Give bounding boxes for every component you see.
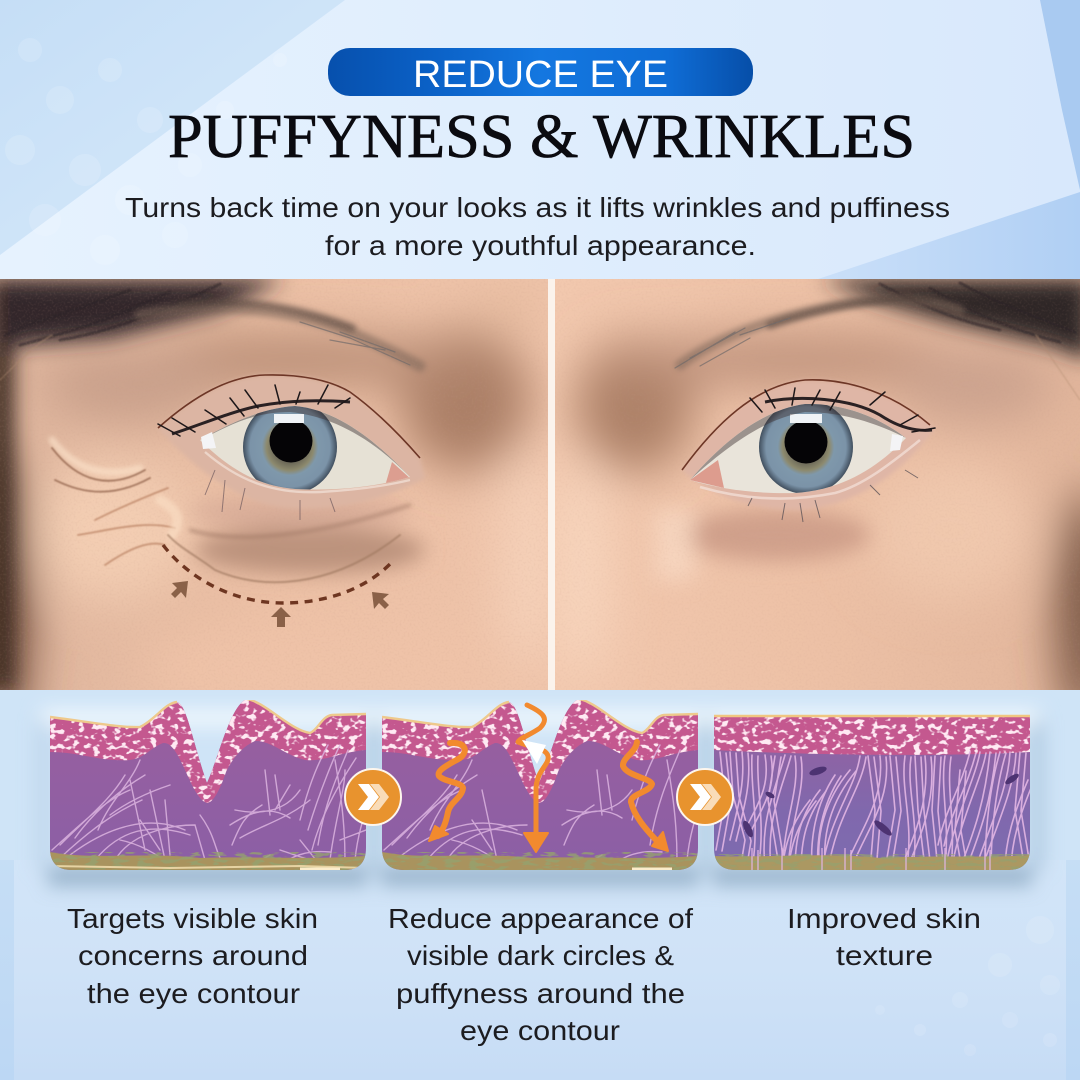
caption: step 1 — [67, 903, 318, 1009]
arrow badge: step 1 to step 2 — [345, 769, 401, 825]
caption: step 2: eye contour — [460, 1015, 620, 1046]
arrow: left — [429, 743, 465, 841]
skin diagram 1: wrinkled skin — [50, 698, 366, 880]
eye — [158, 375, 425, 520]
skin grain — [0, 280, 335, 688]
arrow badge: step 2 to step 3 — [677, 769, 733, 825]
hair — [880, 283, 1080, 400]
subcutaneous layer — [50, 852, 366, 870]
caption: step 1: Targets visible skin — [67, 903, 318, 934]
dermis fibers — [52, 745, 366, 868]
badge: reduce eye — [328, 48, 753, 96]
caption: step 2: Reduce appearance of — [388, 903, 693, 934]
caption: step 2 — [388, 903, 693, 1046]
arrow: center — [518, 705, 548, 852]
bottom background — [0, 690, 1080, 1080]
skin diagram 2: active treatment — [382, 698, 698, 880]
arrow up — [271, 607, 291, 627]
arrow: right — [623, 742, 668, 851]
top background — [0, 0, 1080, 280]
caption: step 2: puffyness around the — [396, 978, 685, 1009]
orange penetration arrows — [429, 705, 668, 852]
title: PUFFYNESS & WRINKLES — [168, 103, 915, 171]
eyebrow — [675, 298, 960, 368]
caption: step 1: the eye contour — [87, 978, 300, 1009]
arrow up-left — [372, 592, 389, 609]
badge: reduce eye: REDUCE EYE — [413, 54, 668, 96]
caption: step 3 — [787, 903, 981, 971]
cells — [741, 765, 1020, 839]
photo: after, smooth eye — [552, 279, 1080, 730]
caption: step 3: Improved skin — [787, 903, 981, 934]
panel shadows — [36, 708, 1044, 886]
before/after eye photo — [0, 279, 1080, 690]
subtitle: for a more youthful appearance. — [325, 230, 756, 261]
wrinkles — [52, 440, 410, 582]
subtitle — [125, 192, 950, 261]
caption: step 1: concerns around — [78, 940, 308, 971]
hair — [0, 284, 220, 380]
eyebrow — [140, 302, 420, 366]
photo: before, wrinkled eye — [0, 279, 548, 690]
caption: step 3: texture — [836, 940, 933, 971]
caption: step 2: visible dark circles & — [407, 940, 674, 971]
epidermis speckle — [50, 698, 366, 808]
skin diagram 3: improved skin — [714, 716, 1034, 876]
collagen fibers — [716, 752, 1034, 871]
dashed contour — [163, 545, 392, 603]
arrow up-right — [171, 581, 188, 598]
subtitle: Turns back time on your looks as it lifts wrinkles and puffiness — [125, 192, 950, 223]
eye — [682, 380, 935, 522]
